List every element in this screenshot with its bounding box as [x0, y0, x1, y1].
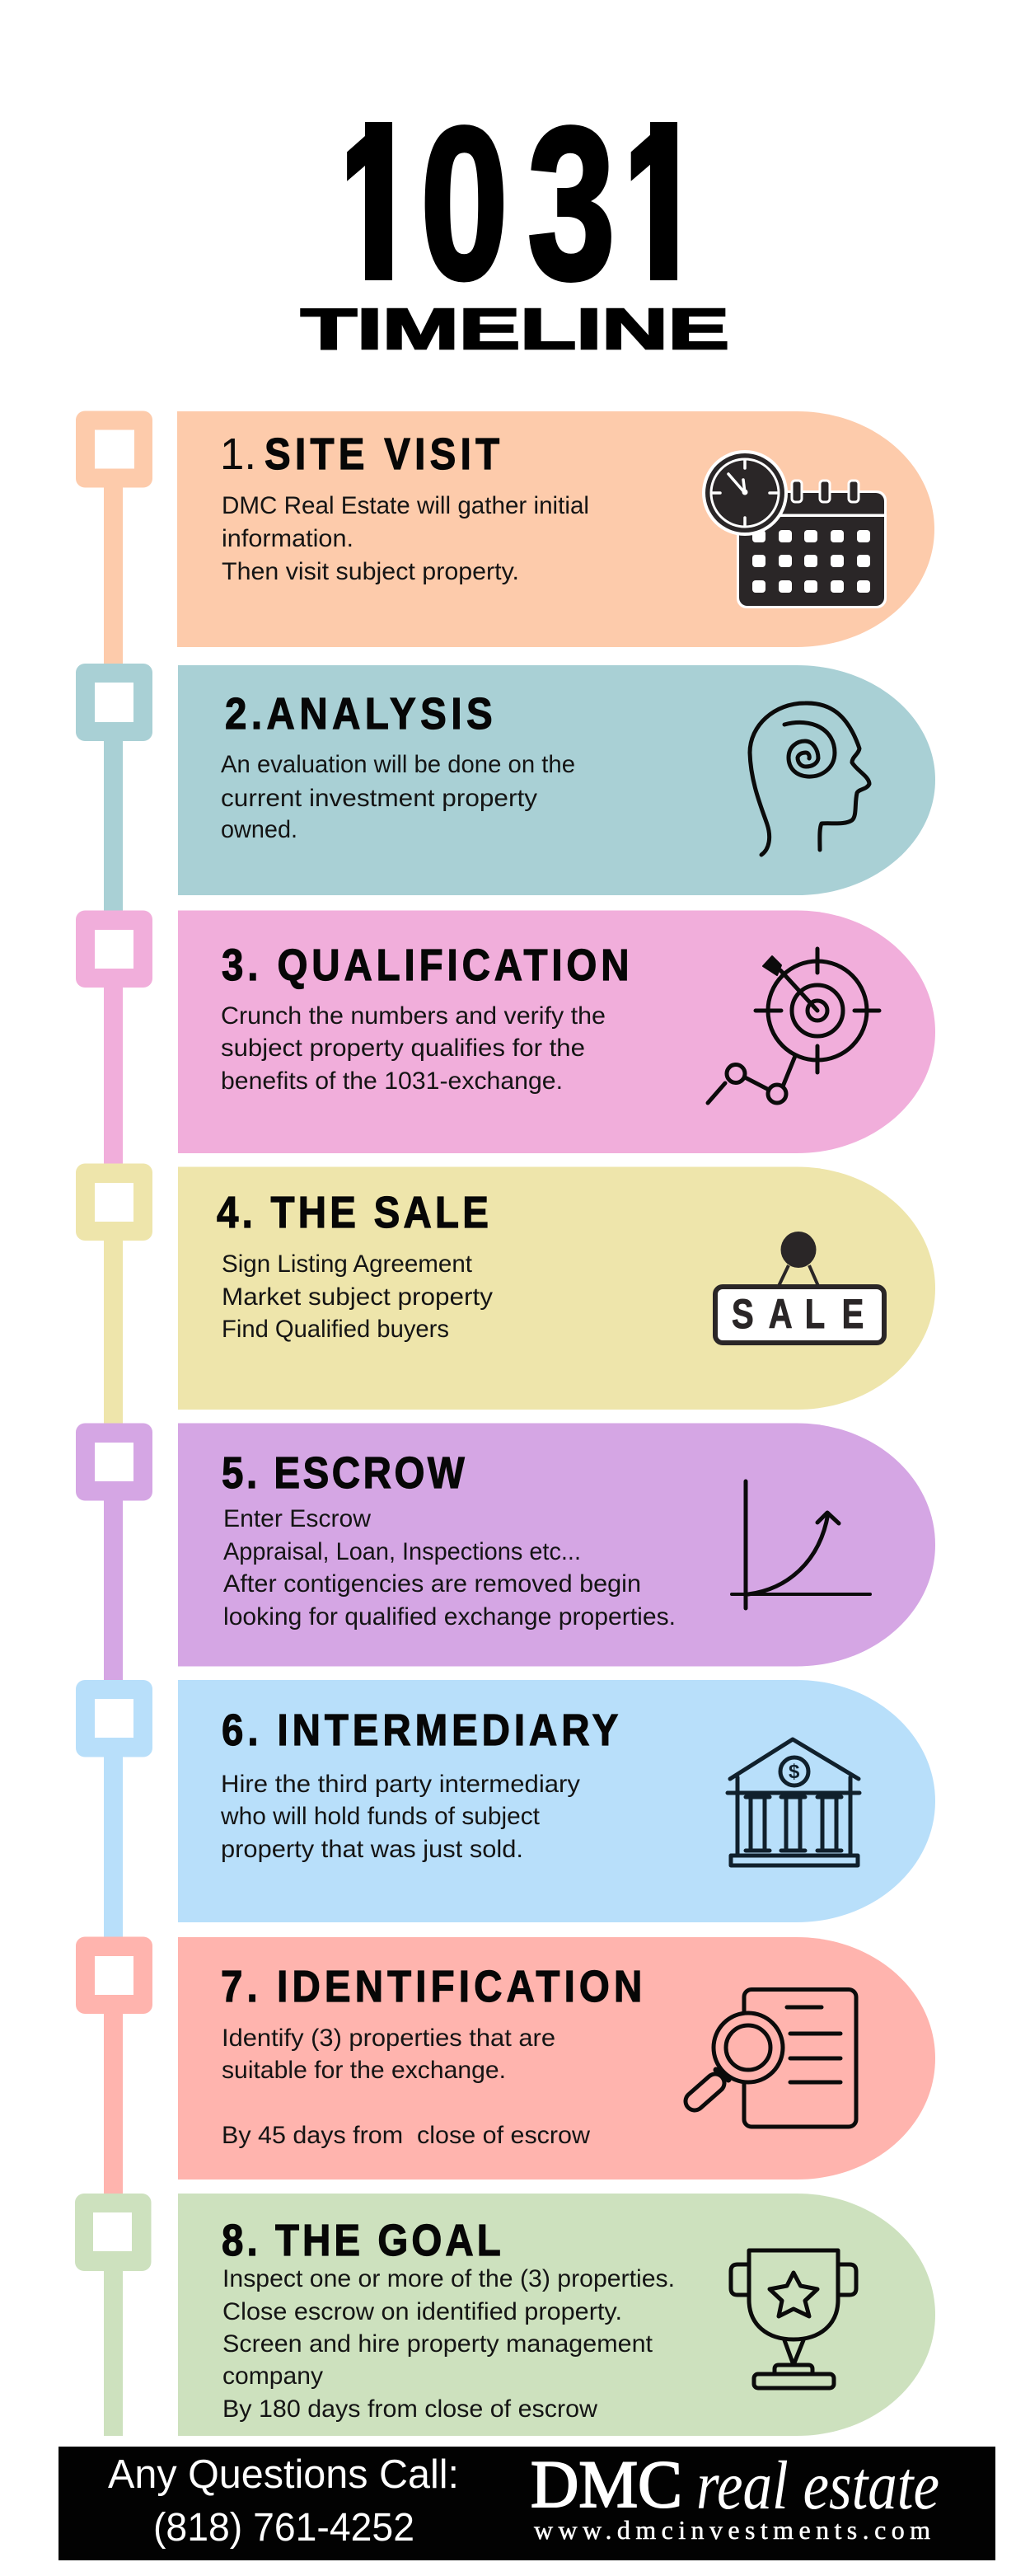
text: the goal body: company: [222, 2363, 323, 2390]
step 3: qualification: [76, 910, 935, 1166]
text: qualification body: [221, 1002, 606, 1095]
panel: intermediary: [178, 1680, 935, 1922]
step 1: site visit: [76, 411, 934, 665]
step 7: identification: [76, 1937, 935, 2194]
text: the sale body: Sign Listing Agreement: [222, 1250, 473, 1278]
text: intermediary body: who will hold funds of subject: [220, 1803, 541, 1830]
logo: DMC real estate: [531, 2447, 939, 2545]
logo: DMC real estate: DMC: [531, 2447, 682, 2522]
step 2: analysis: [76, 664, 935, 913]
text: qualification body: benefits of the 1031-exchange.: [221, 1067, 563, 1095]
icon: magnifier over document: [695, 1990, 856, 2127]
timeline marker 6: [76, 1680, 152, 1938]
timeline marker 3: [76, 910, 152, 1166]
panel: qualification: [178, 910, 935, 1153]
icon: bank building: $: [789, 1761, 800, 1783]
text: analysis body: [221, 751, 575, 843]
text: escrow body: After contigencies are removed begin: [223, 1570, 641, 1598]
heading: 5. ESCROW: 5. ESCROW: [222, 1448, 465, 1498]
text: identification body: suitable for the exchange.: [222, 2057, 506, 2084]
heading: 4. THE SALE: 4. THE SALE: [217, 1187, 489, 1237]
panel: the goal: [178, 2194, 935, 2436]
text: escrow body: Appraisal, Loan, Inspections etc...: [223, 1538, 581, 1565]
text: the goal body: [222, 2265, 675, 2423]
step 6: intermediary: [76, 1680, 935, 1938]
timeline marker 4: [76, 1164, 152, 1424]
icon: trophy with star: [731, 2250, 856, 2388]
logo: DMC real estate: real estate: [696, 2447, 939, 2524]
timeline marker 2: [76, 664, 152, 913]
panel: identification: [178, 1937, 935, 2180]
text: site visit body: Then visit subject property.: [222, 558, 519, 585]
text: the sale body: Find Qualified buyers: [222, 1316, 449, 1343]
text: intermediary body: property that was just sold.: [221, 1836, 523, 1863]
heading: 2.ANALYSIS: 2.ANALYSIS: [225, 688, 493, 739]
text: identification body: [222, 2025, 590, 2149]
text: escrow body: looking for qualified exchange properties.: [223, 1603, 676, 1631]
text: site visit body: DMC Real Estate will gather initial: [222, 492, 589, 519]
text: qualification body: Crunch the numbers and verify the: [221, 1002, 606, 1030]
icon: sale sign: SALE: [732, 1291, 864, 1337]
step 5: escrow: [76, 1423, 935, 1682]
title number 1031: 1031: [338, 82, 709, 324]
title: [301, 82, 729, 361]
step 8: the goal: [75, 2194, 935, 2436]
text: intermediary body: [220, 1771, 580, 1863]
text: the goal body: Close escrow on identified property.: [222, 2298, 622, 2325]
icon: calendar and clock: [702, 450, 887, 608]
text: site visit body: [222, 492, 589, 585]
timeline marker 5: [76, 1423, 152, 1682]
timeline marker 1: [76, 411, 152, 665]
timeline marker 7: [76, 1937, 152, 2194]
icon: sale sign: [715, 1232, 884, 1343]
icon: target with arrow and trend line: [708, 949, 879, 1103]
text: the goal body: Inspect one or more of the (3) properties.: [222, 2265, 675, 2292]
text: site visit body: information.: [222, 525, 353, 552]
panel: the sale: [178, 1167, 935, 1410]
text: escrow body: Enter Escrow: [223, 1505, 371, 1532]
text: the sale body: [222, 1250, 493, 1343]
heading: 1. SITE VISIT: SITE VISIT: [265, 429, 499, 479]
icon: bank building: [728, 1739, 859, 1865]
heading: 1. SITE VISIT: 1.: [220, 429, 256, 479]
icon: head with spiral: [750, 703, 869, 855]
panel: site visit: [177, 411, 934, 647]
text: the goal body: By 180 days from close of escrow: [222, 2395, 597, 2423]
step 4: the sale: [76, 1164, 935, 1424]
text: analysis body: current investment property: [221, 785, 537, 812]
text: the goal body: Screen and hire property management: [222, 2330, 653, 2358]
heading: 7. IDENTIFICATION: 7. IDENTIFICATION: [221, 1961, 642, 2011]
text: call to action: [108, 2452, 459, 2550]
panel: analysis: [178, 665, 935, 895]
heading: 8. THE GOAL: 8. THE GOAL: [222, 2215, 501, 2265]
timeline marker 8: [75, 2194, 152, 2436]
text: escrow body: [223, 1505, 676, 1631]
title word TIMELINE: TIMELINE: [301, 297, 729, 361]
text: the sale body: Market subject property: [222, 1283, 493, 1311]
text: identification body: Identify (3) properties that are: [222, 2025, 555, 2052]
text: analysis body: An evaluation will be done on the: [221, 751, 575, 778]
footer contact bar: [59, 2447, 995, 2560]
text: call to action: Any Questions Call:: [108, 2452, 459, 2497]
text: intermediary body: Hire the third party intermediary: [221, 1771, 580, 1798]
text: qualification body: subject property qualifies for the: [221, 1035, 585, 1062]
text: identification body: By 45 days from close of escrow: [222, 2122, 590, 2149]
heading: 3. QUALIFICATION: 3. QUALIFICATION: [222, 940, 630, 990]
text: call to action: (818) 761-4252: [153, 2506, 414, 2550]
panel: escrow: [178, 1423, 935, 1667]
icon: growth chart: [732, 1481, 870, 1608]
heading: 6. INTERMEDIARY: 6. INTERMEDIARY: [222, 1705, 618, 1755]
text: analysis body: owned.: [221, 816, 297, 843]
logo: DMC real estate: www.dmcinvestments.com: [534, 2515, 930, 2545]
